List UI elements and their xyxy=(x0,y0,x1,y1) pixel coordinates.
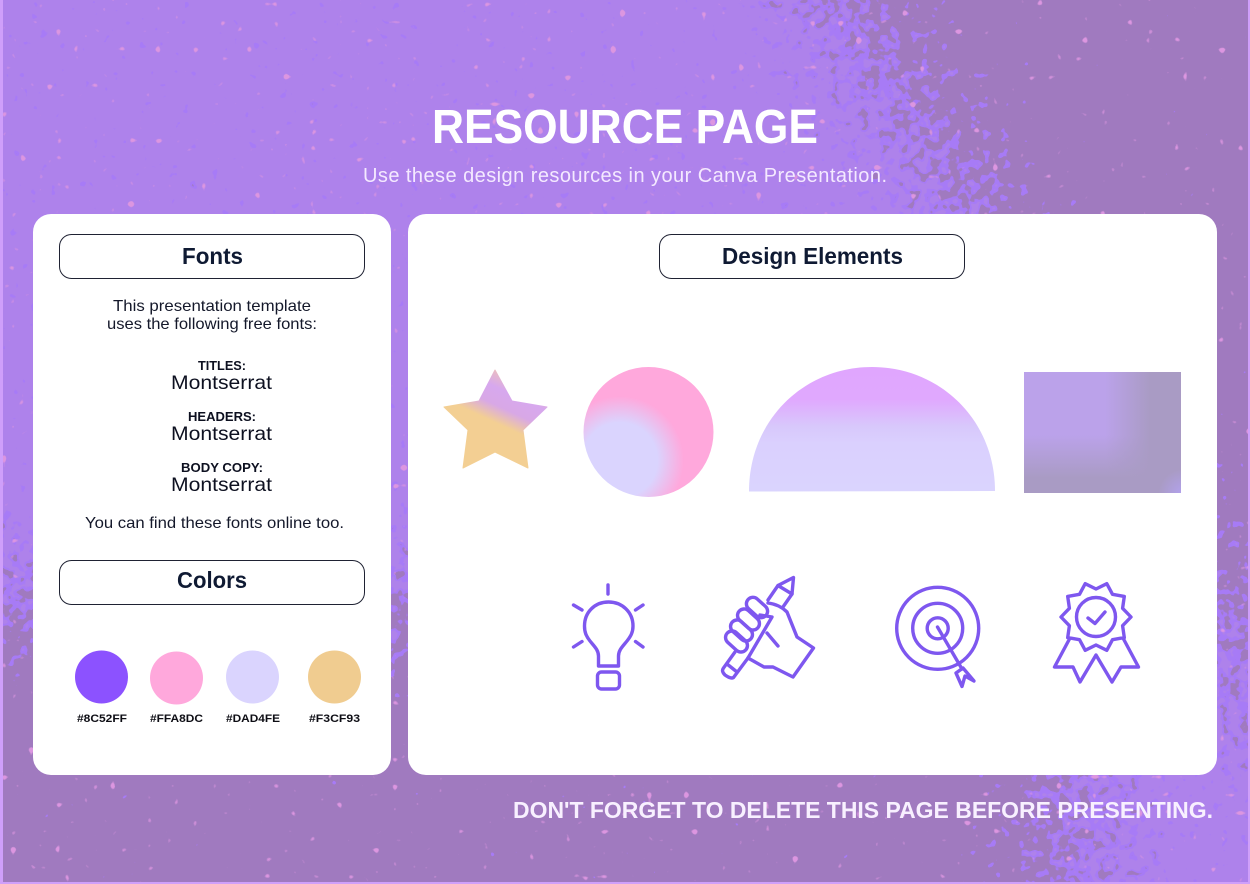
color swatch: purple: #8C52FF xyxy=(77,713,127,725)
text block: font intro: uses the following free fonts: xyxy=(107,316,317,333)
shape: gradient rectangle xyxy=(1024,372,1181,493)
shape: gradient circle xyxy=(584,367,714,497)
color swatch: pink xyxy=(150,652,203,725)
color swatch: lavender: #DAD4FE xyxy=(226,713,280,725)
shape: gradient star xyxy=(444,370,547,468)
text block: titles font xyxy=(171,358,273,394)
subtitle: Use these design resources in your Canva Presentation. xyxy=(363,165,887,187)
text block: body copy font xyxy=(171,460,273,496)
icon: target with arrow xyxy=(897,587,979,686)
color swatch: pink: #FFA8DC xyxy=(150,713,203,725)
heading: fonts xyxy=(60,234,364,278)
text block: font intro xyxy=(107,298,317,333)
heading: fonts: Fonts xyxy=(182,243,243,269)
footer note: DON'T FORGET TO DELETE THIS PAGE BEFORE PRESENTING. xyxy=(513,797,1213,823)
color swatch: tan xyxy=(308,650,361,725)
heading: design elements: Design Elements xyxy=(722,243,903,269)
text block: titles font: Montserrat xyxy=(171,372,273,394)
text block: titles font: TITLES: xyxy=(198,358,246,373)
color swatch: tan: #F3CF93 xyxy=(309,713,360,725)
panel: design elements xyxy=(408,214,1217,775)
heading: colors: Colors xyxy=(177,567,247,593)
text block: headers font: HEADERS: xyxy=(188,409,256,424)
title: RESOURCE PAGE xyxy=(432,101,818,154)
text block: font intro: This presentation template xyxy=(113,298,311,315)
heading: design elements xyxy=(660,234,964,278)
icon: light bulb xyxy=(574,585,643,689)
panel: fonts and colors xyxy=(33,214,391,775)
shape: gradient semicircle xyxy=(749,367,995,492)
text block: headers font xyxy=(171,409,273,445)
heading: colors xyxy=(60,560,364,604)
text block: headers font: Montserrat xyxy=(171,423,273,445)
color swatch: lavender xyxy=(226,650,280,725)
text block: body copy font: BODY COPY: xyxy=(181,460,263,475)
icon: award ribbon badge xyxy=(1054,584,1138,682)
color swatch: purple xyxy=(75,650,128,725)
text block: body copy font: Montserrat xyxy=(171,474,273,496)
text block: font note: You can find these fonts online too. xyxy=(85,515,344,532)
icon: hand holding pencil xyxy=(723,578,814,678)
